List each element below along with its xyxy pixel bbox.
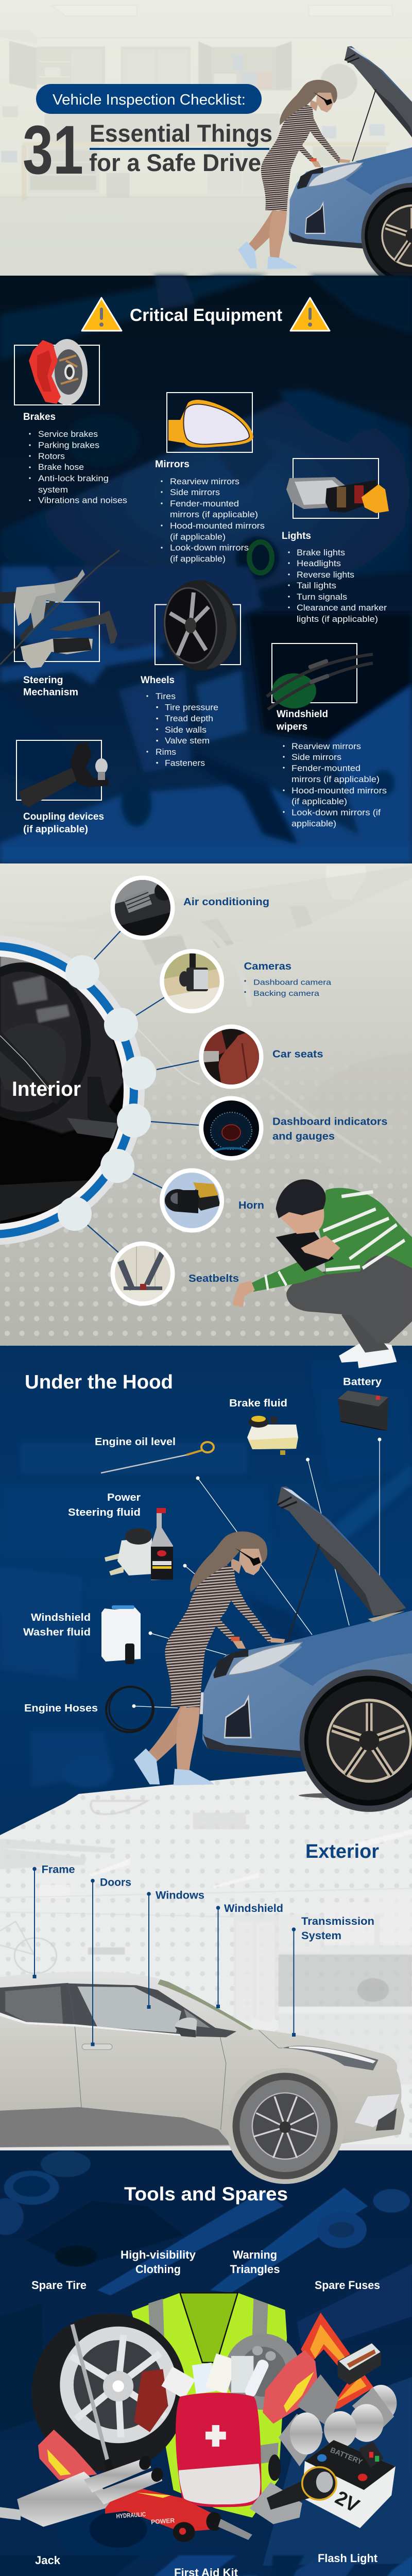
callout: frame — [32, 1863, 75, 1978]
list: brakes — [29, 429, 127, 505]
callout: transmission system: Transmission — [301, 1915, 374, 1927]
label: engine hoses — [24, 1682, 159, 1737]
icon: wiper blades — [267, 654, 373, 709]
item: air conditioning — [110, 876, 269, 940]
list: lights: lights (if applicable) — [297, 614, 378, 624]
heading with warning triangles — [82, 298, 330, 331]
label: brake fluid — [229, 1398, 298, 1455]
photo: car horn — [164, 1172, 220, 1229]
item: air conditioning: Air conditioning — [183, 896, 269, 908]
item: cameras — [160, 949, 332, 1013]
list: wheels: Rims — [156, 747, 176, 757]
item: steering mechanism: Mechanism — [23, 686, 78, 698]
panel: tools and spares — [0, 2150, 412, 2576]
floor jack: HYDRAULIC — [116, 2511, 146, 2520]
section title: Tools and Spares — [124, 2183, 288, 2205]
warning triangle — [301, 2313, 374, 2410]
item: steering mechanism — [0, 550, 119, 698]
item labels: Triangles — [230, 2263, 280, 2276]
list: windshield wipers: (if applicable) — [291, 796, 347, 806]
callout: windshield: Windshield — [224, 1902, 283, 1914]
list: lights: Clearance and marker — [297, 603, 387, 613]
section title: Exterior — [305, 1841, 379, 1862]
item: coupling devices: Coupling devices — [23, 811, 104, 822]
label: battery: Battery — [343, 1377, 382, 1388]
item: horn: Horn — [238, 1200, 264, 1211]
tools collage — [0, 2293, 397, 2542]
engine background — [0, 1360, 412, 1788]
woman and car with raised hood — [134, 1486, 412, 1812]
list: wheels — [146, 691, 218, 768]
list: cameras — [244, 978, 332, 998]
callout: doors — [91, 1876, 131, 2046]
callouts — [32, 1863, 374, 2046]
list: wheels: Tire pressure — [165, 703, 218, 713]
icon: headlight, tail light and turn signal — [286, 477, 389, 513]
car battery — [302, 2440, 396, 2528]
item: cameras: Cameras — [244, 961, 291, 972]
label: power steering fluid: Steering fluid — [68, 1507, 141, 1518]
callout: windshield — [216, 1902, 283, 2008]
label: windshield washer fluid: Windshield — [31, 1612, 91, 1623]
item: horn — [160, 1168, 264, 1232]
silver car — [0, 1972, 405, 2184]
garage background — [1, 41, 389, 200]
item labels: Jack — [35, 2554, 61, 2567]
ghost car interior background and dots — [0, 866, 412, 1346]
title: for a Safe Drive — [89, 149, 261, 176]
title: 31 — [23, 112, 83, 189]
list: mirrors: Rearview mirrors — [170, 477, 239, 486]
label: power steering fluid: Power — [107, 1492, 141, 1503]
item: wheels: Wheels — [141, 674, 175, 686]
list: mirrors: (if applicable) — [170, 532, 226, 542]
icon: dipstick — [101, 1442, 214, 1473]
list: cameras: Dashboard camera — [253, 978, 332, 987]
photo: air vent — [115, 880, 170, 936]
list: windshield wipers: Side mirrors — [291, 752, 341, 762]
item labels: Clothing — [135, 2263, 181, 2276]
item: dashboard indicators and gauges — [199, 1096, 387, 1160]
list: mirrors: Look-down mirrors — [170, 543, 249, 552]
list: wheels: Tread depth — [165, 714, 213, 723]
spare tire — [31, 2313, 186, 2473]
exhaust muffler — [0, 2454, 165, 2527]
icon: tow hitch — [19, 742, 108, 807]
list: mirrors: Side mirrors — [170, 487, 220, 497]
item labels: Flash Light — [318, 2552, 378, 2565]
engine bay background — [0, 276, 412, 863]
item: windshield wipers: wipers — [276, 721, 307, 733]
icon: battery — [338, 1391, 388, 1431]
woman checking engine under raised hood — [238, 46, 412, 289]
subtitle pill — [36, 84, 262, 114]
item: mirrors: Mirrors — [155, 459, 190, 470]
engine pistons — [279, 2375, 397, 2466]
panel: under the hood — [0, 1346, 412, 1835]
car shadow — [299, 1792, 412, 1799]
photo: red leather seat — [203, 1028, 260, 1086]
garage background and dot pattern — [0, 1762, 412, 2150]
list: lights: Reverse lights — [297, 570, 354, 580]
label: battery — [338, 1377, 388, 1431]
subtitle pill: Vehicle Inspection Checklist: — [53, 92, 246, 108]
item labels: Warning — [233, 2248, 277, 2261]
connector lines and nodes — [58, 931, 199, 1252]
list: mirrors: mirrors (if applicable) — [170, 510, 258, 519]
pointer lines behind the woman — [132, 1437, 381, 1708]
panel: critical equipment — [0, 276, 412, 863]
list: lights: Brake lights — [297, 548, 345, 557]
section title: Under the Hood — [25, 1371, 173, 1393]
item: windshield wipers — [267, 643, 387, 828]
label: engine hoses: Engine Hoses — [24, 1703, 98, 1714]
steering wheel photo — [0, 956, 124, 1224]
list: windshield wipers: applicable) — [291, 819, 336, 828]
icon: warning triangle right — [290, 298, 330, 331]
list: wheels: Tires — [156, 691, 176, 701]
item: seatbelts — [110, 1242, 239, 1306]
item: brakes — [14, 339, 127, 505]
item labels: Spare Fuses — [315, 2279, 380, 2292]
medicine — [161, 2353, 270, 2399]
icon: brake disc and caliper — [29, 339, 88, 405]
icon: brake fluid reservoir — [247, 1416, 298, 1455]
list: lights: Turn signals — [297, 592, 347, 602]
item: seatbelts: Seatbelts — [188, 1273, 239, 1284]
list: wheels: Side walls — [165, 725, 207, 735]
callout: windows — [147, 1889, 204, 2009]
item: coupling devices — [16, 740, 108, 835]
section title: Interior — [12, 1078, 81, 1100]
callout: transmission system — [292, 1915, 374, 2037]
item: car seats: Car seats — [272, 1049, 323, 1060]
list: lights: Tail lights — [297, 581, 336, 590]
label: brake fluid: Brake fluid — [229, 1398, 287, 1409]
flashlight and multimeter — [250, 2454, 336, 2524]
item labels: Spare Tire — [31, 2279, 87, 2292]
section title: Critical Equipment — [130, 306, 282, 325]
list: brakes: Brake hose — [38, 462, 84, 472]
list: brakes: Anti-lock braking — [38, 473, 109, 483]
list: wheels: Fasteners — [165, 758, 205, 768]
list: brakes: system — [38, 485, 68, 495]
list: mirrors: Hood-mounted mirrors — [170, 521, 265, 531]
list: wheels: Valve stem — [165, 736, 210, 745]
item: dashboard indicators and gauges: and gauges — [272, 1131, 335, 1142]
icon: steering rack parts — [0, 550, 119, 668]
photo: seat belts on rear seat — [114, 1246, 171, 1303]
panel: interior — [0, 863, 412, 1368]
item: lights: Lights — [282, 530, 311, 541]
label: engine oil level — [95, 1436, 214, 1473]
callout: transmission system: System — [301, 1929, 341, 1942]
list: mirrors: Fender-mounted — [170, 499, 239, 509]
list: brakes: Vibrations and noises — [38, 496, 127, 505]
icon: washer tank — [101, 1605, 141, 1664]
icon: reservoir and bottle — [105, 1508, 173, 1580]
fuse box — [338, 2343, 381, 2385]
icon: warning triangle left — [82, 298, 122, 331]
label: power steering fluid — [68, 1492, 173, 1580]
label: engine oil level: Engine oil level — [95, 1436, 176, 1448]
list: mirrors — [161, 477, 265, 564]
list: windshield wipers: Rearview mirrors — [291, 741, 361, 751]
list: windshield wipers: Hood-mounted mirrors — [291, 786, 387, 795]
list: windshield wipers: mirrors (if applicable) — [291, 774, 380, 784]
high-visibility vest — [131, 2293, 287, 2518]
label: windshield washer fluid — [23, 1605, 141, 1664]
callout: windows: Windows — [156, 1889, 204, 1901]
floor jack — [105, 2487, 252, 2542]
brake calipers — [38, 2350, 317, 2480]
photo: speedometer — [203, 1100, 259, 1156]
man checking tablet — [233, 1179, 412, 1368]
list: lights: Headlights — [297, 558, 341, 568]
list: windshield wipers: Look-down mirrors (if — [291, 808, 381, 818]
item: windshield wipers: Windshield — [277, 708, 328, 720]
label: windshield washer fluid: Washer fluid — [23, 1627, 91, 1638]
icon: coiled hose — [101, 1682, 159, 1737]
callout: doors: Doors — [100, 1876, 131, 1889]
brake rotor — [225, 2333, 301, 2410]
list: mirrors: (if applicable) — [170, 554, 226, 564]
first aid kit — [176, 2393, 262, 2507]
car battery: 2V — [332, 2486, 363, 2517]
item: wheels — [141, 577, 242, 768]
lug wrench — [72, 2325, 110, 2471]
item: car seats — [199, 1024, 323, 1089]
photo: dash camera — [164, 953, 220, 1010]
car battery: BATTERY — [329, 2446, 364, 2467]
list: windshield wipers — [283, 741, 387, 828]
icon: tire and rim — [159, 577, 242, 674]
item: mirrors — [155, 393, 265, 564]
list: brakes: Service brakes — [38, 429, 98, 439]
item: lights — [282, 459, 389, 624]
list: brakes: Parking brakes — [38, 440, 99, 450]
floor jack: POWER — [151, 2517, 175, 2526]
item: coupling devices: (if applicable) — [23, 823, 88, 835]
item labels: High-visibility — [121, 2248, 196, 2261]
item labels — [31, 2248, 380, 2576]
tool set background — [0, 2151, 412, 2566]
item: dashboard indicators and gauges: Dashboard indicators — [272, 1116, 387, 1127]
list: brakes: Rotors — [38, 451, 65, 461]
callout: frame: Frame — [42, 1863, 75, 1875]
title: Essential Things — [90, 120, 272, 147]
panel: hero — [0, 0, 412, 289]
list: windshield wipers: Fender-mounted — [291, 764, 360, 773]
item: steering mechanism: Steering — [23, 674, 63, 686]
item: brakes: Brakes — [23, 411, 56, 422]
panel: exterior — [0, 1762, 412, 2184]
list: cameras: Backing camera — [253, 989, 320, 998]
interior wheel circle — [0, 935, 145, 1245]
icon: side mirror — [168, 400, 253, 448]
title — [24, 124, 272, 174]
list: lights — [288, 548, 387, 624]
green oil cap — [249, 542, 272, 573]
